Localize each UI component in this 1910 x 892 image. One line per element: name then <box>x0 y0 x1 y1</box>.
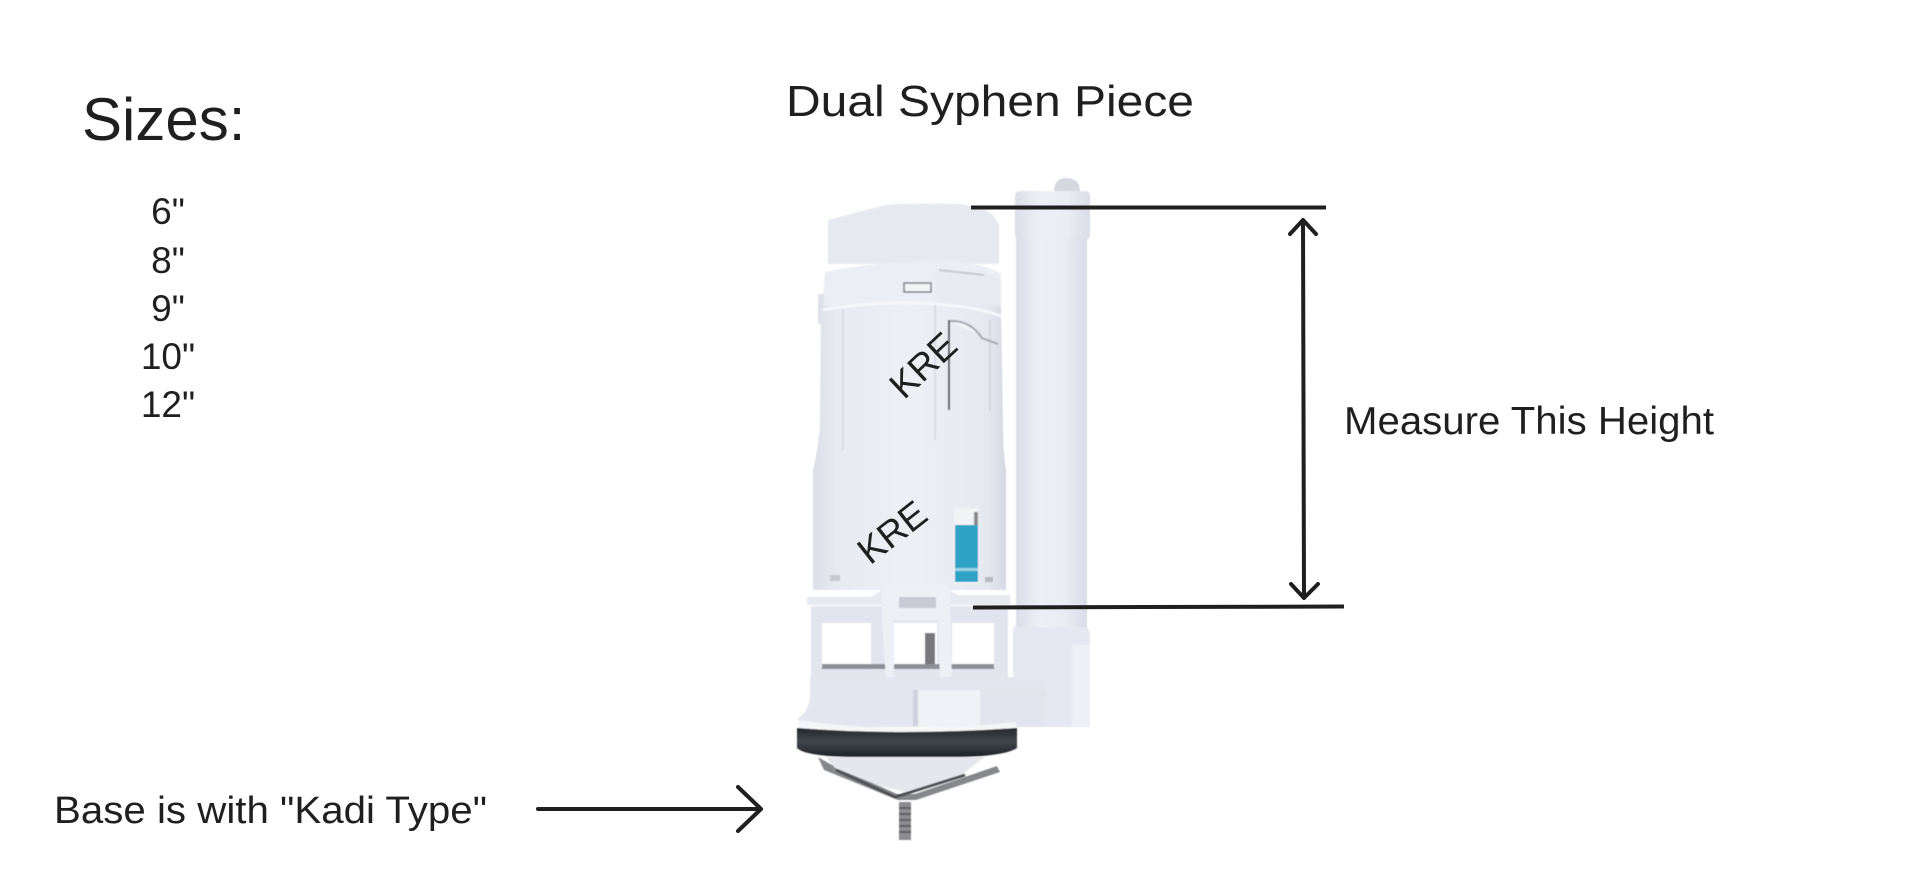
bottom measurement line <box>973 606 1344 608</box>
title: Dual Syphen Piece <box>786 77 1194 126</box>
lid <box>828 204 999 264</box>
cage with windows <box>807 583 1010 680</box>
heading: sizes: Sizes: <box>82 86 245 153</box>
blue flush indicator <box>954 508 979 584</box>
product photo: dual syphon flush valve <box>797 178 1090 840</box>
screw <box>899 802 911 840</box>
top measurement line <box>971 206 1326 210</box>
base plate <box>798 677 1047 727</box>
list of sizes: 10" <box>141 336 195 377</box>
list of sizes: 12" <box>141 384 195 425</box>
collar ring <box>818 262 1001 324</box>
label: measure this height: Measure This Height <box>1344 400 1714 443</box>
main body <box>813 303 1006 590</box>
label: base type: Base is with "Kadi Type" <box>54 790 487 832</box>
watermark upper: KRE <box>882 324 965 406</box>
double-headed height arrow <box>1290 220 1318 598</box>
watermark lower: KRE <box>850 493 935 572</box>
list of sizes <box>141 191 195 425</box>
overflow tube <box>1013 178 1090 727</box>
list of sizes: 9" <box>151 288 185 329</box>
list of sizes: 6" <box>151 191 185 232</box>
metal clip <box>818 757 1000 800</box>
arrow to base <box>538 787 761 831</box>
rubber gasket <box>797 720 1017 757</box>
list of sizes: 8" <box>151 240 185 281</box>
